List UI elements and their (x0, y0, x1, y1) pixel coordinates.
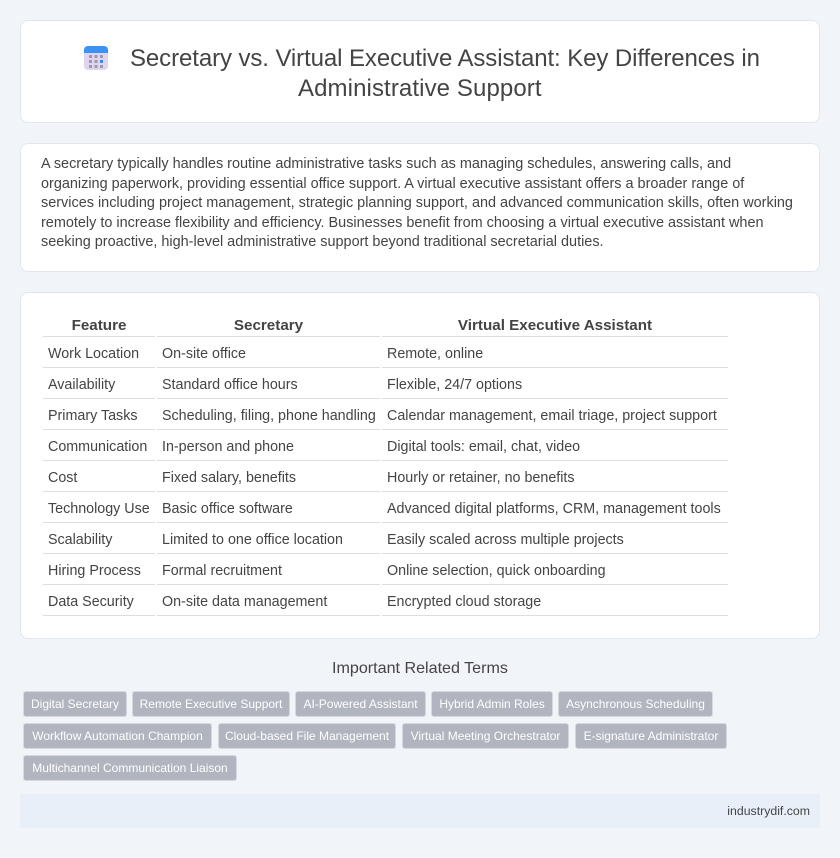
comparison table: Calendar management, email triage, project support (387, 408, 717, 424)
comparison table: Advanced digital platforms, CRM, management tools (387, 501, 721, 517)
comparison table: Limited to one office location (162, 532, 343, 548)
comparison table: Availability (48, 377, 115, 393)
comparison table (43, 317, 728, 616)
tags: related terms: Cloud-based File Management (225, 729, 389, 743)
tags: related terms: Remote Executive Support (140, 697, 282, 711)
comparison table: Remote, online (387, 346, 483, 362)
comparison table: Fixed salary, benefits (162, 470, 296, 486)
intro paragraph: seeking proactive, high-level administrative support beyond traditional secretarial duties. (41, 234, 604, 250)
comparison table: Communication (48, 439, 147, 455)
panel: intro text (20, 143, 820, 272)
comparison table: Hiring Process (48, 563, 141, 579)
comparison table: Hourly or retainer, no benefits (387, 470, 575, 486)
comparison table: Feature (72, 317, 126, 334)
comparison table: In-person and phone (162, 439, 294, 455)
comparison table: Scalability (48, 532, 112, 548)
comparison table: Standard office hours (162, 377, 298, 393)
intro paragraph: services including project management, strategic planning support, and advanced communication skills, often working (41, 195, 793, 211)
comparison table: Secretary (234, 317, 303, 334)
comparison table: Formal recruitment (162, 563, 282, 579)
comparison table: Flexible, 24/7 options (387, 377, 522, 393)
comparison table: Encrypted cloud storage (387, 594, 541, 610)
icon: calendar (84, 46, 108, 70)
intro paragraph: remotely to increase flexibility and efficiency. Businesses benefit from choosing a virtual executive assistant when (41, 214, 764, 230)
tags: related terms: Virtual Meeting Orchestrator (411, 729, 560, 743)
comparison table: Easily scaled across multiple projects (387, 532, 624, 548)
comparison table: Virtual Executive Assistant (458, 317, 652, 334)
comparison table: Work Location (48, 346, 139, 362)
comparison table: Basic office software (162, 501, 293, 517)
tags: related terms: Asynchronous Scheduling (566, 697, 705, 711)
title: Secretary vs. Virtual Executive Assistant: Key Differences in (130, 45, 760, 72)
title (130, 45, 760, 102)
intro paragraph (41, 156, 793, 250)
tags: related terms: Digital Secretary (31, 697, 119, 711)
title: Administrative Support (298, 75, 542, 102)
related terms heading: Important Related Terms (332, 659, 508, 677)
panel: title card (20, 20, 820, 123)
intro paragraph: organizing paperwork, providing essential office support. A virtual executive assistant offers a broader range of (41, 176, 744, 192)
comparison table: Scheduling, filing, phone handling (162, 408, 376, 424)
comparison table: Online selection, quick onboarding (387, 563, 606, 579)
intro paragraph: A secretary typically handles routine administrative tasks such as managing schedules, answering calls, and (41, 156, 731, 172)
footer bar (20, 794, 820, 828)
comparison table: On-site office (162, 346, 246, 362)
comparison table: On-site data management (162, 594, 327, 610)
tags: related terms: Multichannel Communication Liaison (32, 761, 228, 775)
tags: related terms: E-signature Administrator (584, 729, 718, 743)
panel: comparison table (20, 292, 820, 639)
comparison table: Cost (48, 470, 77, 486)
tags: related terms: Hybrid Admin Roles (439, 697, 545, 711)
tags: related terms: AI-Powered Assistant (303, 697, 418, 711)
tags: related terms (23, 691, 727, 781)
comparison table: Primary Tasks (48, 408, 138, 424)
footer source: industrydif.com (727, 804, 810, 818)
comparison table: Data Security (48, 594, 134, 610)
comparison table: Digital tools: email, chat, video (387, 439, 580, 455)
comparison table: Technology Use (48, 501, 150, 517)
tags: related terms: Workflow Automation Champion (32, 729, 203, 743)
